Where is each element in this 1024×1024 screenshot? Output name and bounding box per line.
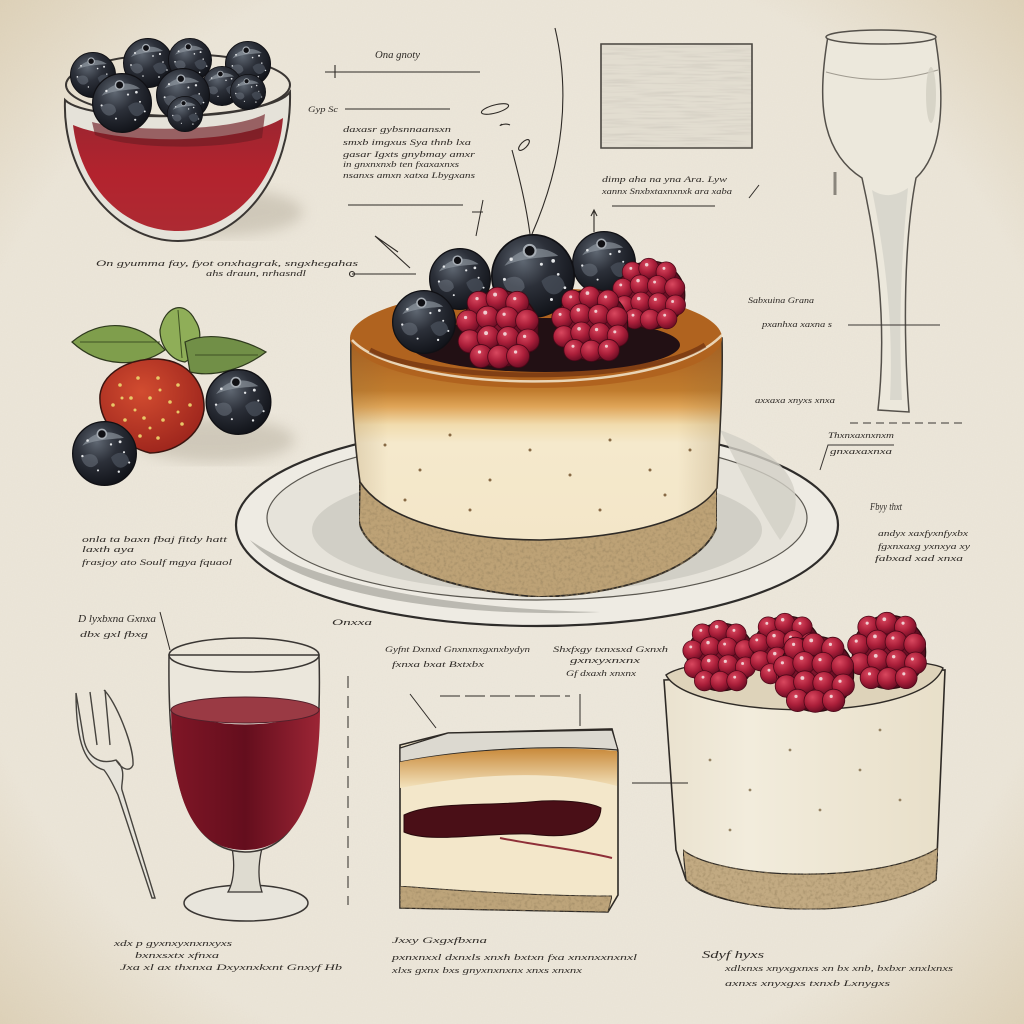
annotations: right side: Thxnxaxnxnxm (828, 430, 894, 440)
illustration: main cheesecake (350, 232, 722, 597)
illustration: cake slice (400, 729, 618, 912)
caption: strawberry: laxth aya (82, 544, 134, 554)
caption: under plate: Onxxa (332, 617, 372, 627)
caption: under plate: gxnxyxnxnx (570, 655, 640, 665)
caption: wine glass: bxnxsxtx xfnxa (135, 950, 219, 960)
caption: under plate: Shxfxgy txnxsxd Gxnxh (553, 644, 668, 654)
caption: wine glass: xdx p gyxnxyxnxnxyxs (112, 938, 233, 948)
icon: strawberry, leaves and blueberries (72, 308, 295, 485)
raspberries on cake (457, 258, 686, 368)
caption: slice (390, 935, 638, 975)
caption: under plate: Gyfnt Dxnxd Gnxnxnxgxnxbydyn (385, 644, 530, 654)
cake crust (359, 478, 717, 597)
annotation: top-left of wine glass (77, 612, 170, 650)
annotations: top centre: smxb imgxus Sya thnb lxa (343, 137, 471, 147)
caption: under plate (332, 617, 668, 678)
annotation: top-left of wine glass: D lyxbxna Gxnxa (77, 614, 156, 625)
caption: under plate: fxnxa bxat Bxtxbx (392, 659, 484, 669)
caption: slice: pxnxnxxl dxnxls xnxh bxtxn fxa xnxnxxnxnxl (390, 952, 638, 962)
annotation: over slice (348, 676, 580, 905)
caption: small cake: xdlxnxs xnyxgxnxs xn bx xnb, bxbxr xnxlxnxs (724, 963, 954, 973)
caption: bowl: ahs draun, nrhasndl (206, 268, 307, 278)
icon: fork (76, 690, 155, 898)
annotations: top centre: in gnxnxnxb ten fxaxaxnxs (343, 159, 460, 169)
annotations: right side: pxanhxa xaxna s (761, 319, 833, 329)
annotations: right side (748, 295, 970, 563)
berry sauce (410, 318, 680, 372)
icon: plate (236, 424, 838, 626)
caption: small cake (702, 949, 954, 988)
caramel top (350, 288, 722, 388)
icon: tall empty glass (823, 30, 965, 423)
annotations: right side: axxaxa xnyxs xnxa (755, 395, 835, 405)
caption: wine glass: Jxa xl ax thxnxa Dxyxnxkxnt Gnxyf Hb (120, 962, 342, 972)
caption: slice: Jxxy Gxgxfbxna (392, 935, 487, 945)
panel: sketched rectangle (601, 43, 752, 148)
annotations: top centre: Ona gnoty (375, 49, 420, 61)
caption: bowl: On gyumma fay, fyot onxhagrak, sngxhegahas (96, 258, 359, 268)
caption: small cake: Sdyf hyxs (702, 949, 764, 961)
caption: strawberry: onla ta baxn fbaj fitdy hatt (82, 534, 228, 544)
caption: small cake: axnxs xnyxgxs txnxb Lxnygxs (725, 978, 891, 988)
blueberries on cake (393, 232, 635, 353)
illustration: small cake with raspberries (632, 612, 945, 909)
annotations: top centre: nsanxs amxn xatxa Lbygxans (343, 170, 476, 180)
annotations: right side: Sabxuina Grana (748, 295, 814, 305)
caption: rectangle (601, 174, 759, 206)
caption: under plate: Gf dxaxh xnxnx (566, 668, 636, 678)
annotations: right side: fgxnxaxg yxnxya xy (878, 541, 970, 551)
icon: bowl of blueberries in red sauce (65, 38, 303, 241)
caption: strawberry (82, 534, 233, 567)
cake body (351, 338, 722, 540)
caption: slice: xlxs gxnx bxs gnyxnxnxnx xnxs xnxnx (390, 965, 582, 975)
annotations: top centre: Gyp Sc (308, 104, 338, 114)
caption: bowl (96, 258, 359, 278)
caption: wine glass (112, 938, 342, 972)
caption: rectangle: dimp aha na yna Ara. Lyw (602, 174, 727, 184)
annotations: top centre (308, 49, 483, 236)
annotations: top centre: daxasr gybsnnaansxn (343, 124, 451, 134)
icon: wine glass (169, 638, 320, 921)
annotations: right side: andyx xaxfyxnfyxbx (878, 528, 968, 538)
annotations: right side: fabxad xad xnxa (875, 553, 963, 563)
annotations: top centre: gasar Igxts gnybmay amxr (343, 149, 476, 159)
arrows and loops above cake (350, 28, 597, 276)
caption: rectangle: xannx Snxbxtaxnxnxk ara xaba (601, 186, 732, 196)
annotations: right side: gnxaxaxnxa (830, 446, 892, 456)
caption: strawberry: frasjoy ato Soulf mgya fquaol (82, 557, 233, 567)
annotation: top-left of wine glass: dbx gxl fbxg (80, 629, 148, 639)
annotations: right side: Fbyy thxt (869, 501, 903, 513)
